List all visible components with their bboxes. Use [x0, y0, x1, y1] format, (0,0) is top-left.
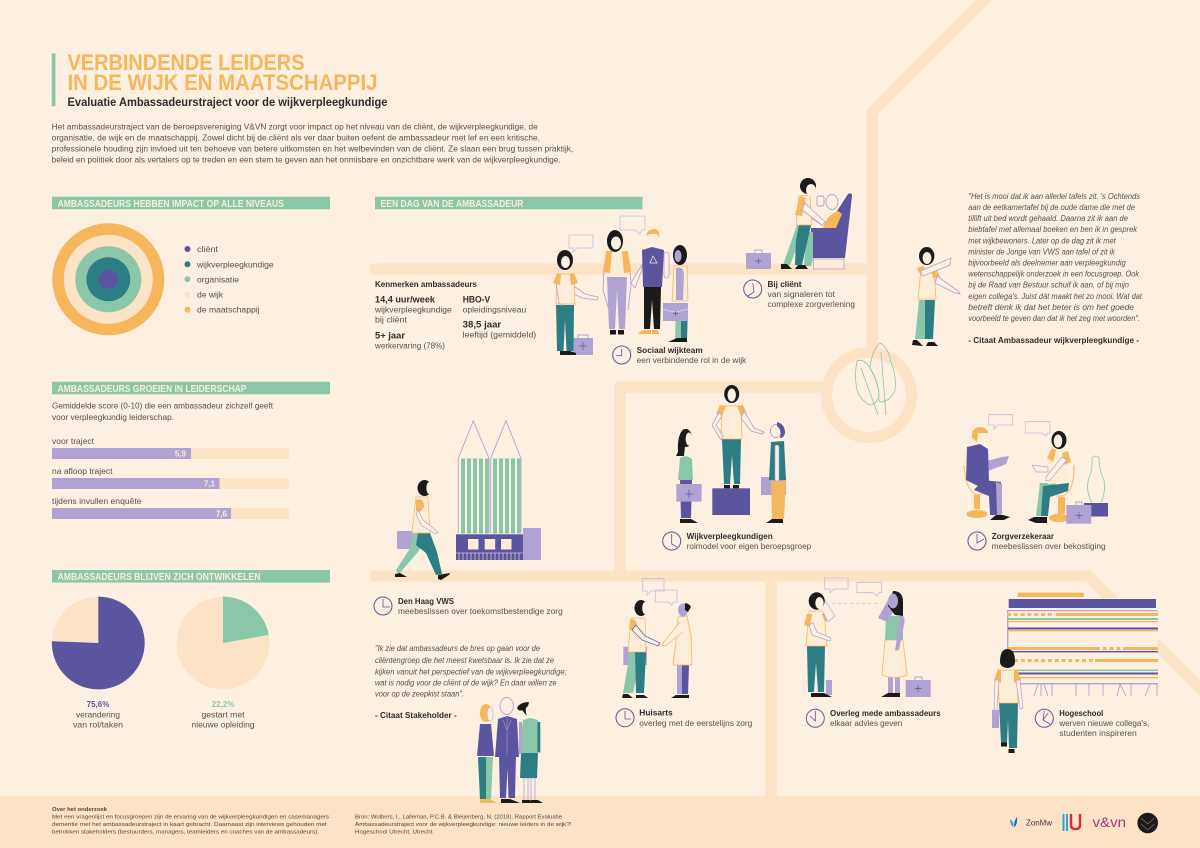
quote: stakeholder: "Ik zie dat ambassadeurs de bres op gaan voor de	[375, 644, 540, 653]
caption: huisarts	[616, 709, 752, 728]
bar chart: 5,9	[175, 450, 187, 459]
about the research: betrokken stakeholders (bestuurders, managers, teamleiders en coaches van de ambassadeurs).	[52, 829, 319, 835]
source: Ambassadeurstraject voor de wijkverpleegkundige: nieuwe leiders in de wijk?!	[355, 822, 572, 828]
pie chart: verandering: verandering	[76, 710, 120, 719]
heading: leiderschap: AMBASSADEURS GROEIEN IN LEIDERSCHAP	[58, 384, 247, 395]
bubbles and dashed line	[824, 578, 882, 604]
quote: ambassadeur: biebtafel met allemaal boeken en ben ik in gesprek	[968, 225, 1138, 234]
title block: VERBINDENDE LEIDERS	[68, 50, 304, 75]
caption: wijkverpleegkundigen	[663, 532, 812, 551]
heading: impact: AMBASSADEURS HEBBEN IMPACT OP ALLE NIVEAUS	[58, 199, 284, 210]
briefcase	[746, 250, 771, 269]
illustration: huisarts	[622, 579, 692, 698]
quote: ambassadeur: bijvoorbeeld als deelnemer aan verpleegkundig	[968, 258, 1126, 268]
heading: een dag van de ambassadeur	[375, 197, 642, 210]
person: colleague on phone	[878, 591, 907, 697]
quote: stakeholder: kijken vanuit het perspectief van de wijkverpleegkundige;	[375, 667, 567, 676]
footer text and logos	[52, 807, 1158, 835]
caption: sociaal wijkteam: een verbindende rol in de wijk	[637, 356, 747, 365]
quote: ambassadeur: minister de Jonge van VWS aan tafel of zit ik	[968, 247, 1116, 256]
illustration: zorgverzekeraar	[964, 415, 1108, 524]
caption: huisarts: overleg met de eerstelijns zorg	[639, 719, 752, 728]
about the research: Over het onderzoek	[52, 807, 107, 813]
briefcase	[1066, 502, 1091, 524]
concentric circles chart	[52, 223, 164, 335]
caption: den haag vws: Den Haag VWS	[398, 597, 455, 606]
pie chart: nieuwe opleiding	[177, 597, 269, 730]
illustration: sociaal wijkteam	[553, 216, 688, 355]
kenmerken ambassadeurs: 38,5 jaar	[463, 320, 501, 330]
pie chart: nieuwe opleiding: nieuwe opleiding	[192, 721, 254, 730]
logo: v&vn: v&vn	[1092, 814, 1126, 830]
person: student from behind	[992, 649, 1023, 753]
legend	[184, 245, 274, 315]
legend: cliënt	[197, 245, 219, 254]
pie chart: verandering	[52, 597, 145, 730]
kenmerken ambassadeurs	[374, 280, 537, 350]
speech bubbles	[569, 216, 645, 252]
title block	[52, 50, 387, 109]
building	[1006, 593, 1158, 698]
pie chart: nieuwe opleiding: gestart met	[202, 710, 245, 719]
caption: sociaal wijkteam	[613, 346, 747, 365]
quote: ambassadeur: tillift uit bed wordt gehaald. Daarna zit ik aan de	[968, 214, 1129, 223]
caption: huisarts: Huisarts	[639, 709, 673, 718]
quote: ambassadeur: wetenschappelijk onderzoek in een focusgroep. Ook	[968, 270, 1140, 279]
bar chart: voor traject	[52, 437, 95, 446]
caption: den haag vws	[374, 597, 563, 616]
bar chart: 7,6	[216, 510, 228, 519]
kenmerken ambassadeurs: 14,4 uur/week	[375, 294, 436, 306]
caption: overleg mede ambassadeurs: elkaar advies geven	[830, 719, 902, 728]
kenmerken ambassadeurs: werkervaring (78%)	[374, 342, 445, 350]
source: Bron: Wolbers, I., Lalleman, P.C.B. & Bleijenberg, N. (2018). Rapport Evaluatie	[355, 815, 562, 821]
kenmerken ambassadeurs: opleidingsniveau	[463, 306, 526, 314]
person: woman green jacket	[517, 702, 543, 803]
person: team member with purple trousers	[603, 230, 631, 334]
person: ambassadeur on phone	[804, 592, 835, 697]
caption: wijkverpleegkundigen: rolmodel voor eigen beroepsgroep	[687, 542, 812, 551]
caption: zorgverzekeraar: meebeslissen over bekostiging	[992, 542, 1106, 551]
person: right looking up	[761, 422, 786, 523]
chart description: voor verpleegkundig leiderschap.	[52, 413, 174, 422]
quote: stakeholder	[375, 644, 567, 720]
person: team member left	[553, 250, 598, 355]
kenmerken ambassadeurs: 5+ jaar	[375, 330, 405, 342]
person: huisarts in white coat	[662, 603, 692, 698]
intro paragraph: beleid en politiek door als vertalers op te treden en een stem te geven aan het onmisbare en onzichtbare werk van de wijkverpleegkundige.	[52, 156, 561, 165]
legend: de maatschappij	[197, 306, 260, 315]
person: man seated	[964, 427, 1010, 520]
caption: bij cliënt: complexe zorgverlening	[768, 300, 855, 309]
caption: bij cliënt: Bij cliënt	[768, 280, 802, 289]
caption: den haag vws: meebeslissen over toekomstbestendige zorg	[398, 607, 563, 616]
illustration: hogeschool	[992, 593, 1158, 753]
quote: stakeholder: cliëntengroep die het meest kwetsbaar is. Ik zie dat ze	[375, 656, 555, 665]
caption: hogeschool	[1035, 709, 1149, 738]
chart description: Gemiddelde score (0-10) die een ambassadeur zichzelf geeft	[52, 402, 274, 410]
person: woman orange hair	[477, 704, 497, 803]
quote: stakeholder: voor op de zeepkist staan".	[375, 690, 464, 698]
plant in pot	[1084, 456, 1108, 516]
footer band	[0, 796, 1200, 848]
person: standing on box	[712, 385, 764, 488]
caption: overleg mede ambassadeurs: Overleg mede ambassadeurs	[830, 709, 941, 718]
caption: bij cliënt	[744, 280, 855, 309]
road network	[375, 0, 1200, 800]
person: left with briefcase	[676, 429, 702, 523]
legend: organisatie	[197, 275, 240, 284]
bar chart: tijdens invullen enquête	[52, 497, 142, 506]
illustration: wijkverpleegkundigen	[676, 385, 786, 523]
logo: ZonMw: ZonMw	[1026, 818, 1052, 828]
caption: zorgverzekeraar: Zorgverzekeraar	[992, 532, 1054, 541]
illustration: den haag building	[395, 421, 541, 580]
panel: groeien in leiderschap	[52, 382, 330, 519]
chair	[811, 193, 852, 269]
person: walking	[395, 480, 450, 580]
kenmerken ambassadeurs: wijkverpleegkundige	[374, 306, 452, 314]
caption: zorgverzekeraar	[968, 532, 1106, 551]
source: Hogeschool Utrecht, Utrecht.	[355, 829, 434, 835]
intro paragraph	[52, 123, 573, 165]
quote: ambassadeur: aan de eetkamertafel bij de oude dame die met de	[968, 203, 1136, 212]
bar chart: 7,1	[204, 480, 216, 489]
quote: ambassadeur: betreft denk ik dat het beter is om het goede	[968, 303, 1135, 312]
quote: ambassadeur: bij de Raad van Bestuur schuif ik aan, of bij mijn	[968, 281, 1130, 290]
logo: HU	[1062, 814, 1080, 831]
icon: plant in circle	[856, 343, 896, 415]
quote: ambassadeur: voorbeeld te geven dan dat ik het zeg met woorden".	[968, 314, 1140, 323]
bar chart	[52, 437, 289, 519]
panel: blijven zich ontwikkelen	[52, 570, 330, 730]
carer	[781, 178, 825, 269]
caption: wijkverpleegkundigen: Wijkverpleegkundigen	[687, 532, 773, 541]
towers	[458, 421, 521, 534]
source	[355, 815, 572, 835]
kenmerken ambassadeurs: leeftijd (gemiddeld)	[463, 330, 537, 340]
intro paragraph: Het ambassadeurstraject van de beroepsvereniging V&VN zorgt voor impact op het niveau van de cliënt, de wijkverpleegkundige, de	[52, 123, 538, 132]
intro paragraph: professionele houding zijn invloed uit ten behoeve van betere uitkomsten en het welbevinden van de cliënt. Ze slaan een brug tussen praktijk,	[52, 145, 573, 154]
about the research: Met een vragenlijst en focusgroepen zijn de ervaring van de wijkverpleegkundigen en casemanagers	[52, 815, 329, 821]
kenmerken ambassadeurs: HBO-V	[463, 294, 491, 306]
kenmerken ambassadeurs: bij cliënt	[375, 316, 408, 324]
caption: bij cliënt: van signaleren tot	[768, 290, 836, 299]
client in chair	[804, 194, 842, 266]
about the research	[52, 807, 329, 835]
quote: ambassadeur	[968, 192, 1143, 345]
quote: stakeholder: wat is nodig voor de cliënt of de wijk? En daar willen ze	[375, 678, 557, 688]
quote: stakeholder: - Citaat Stakeholder -	[375, 711, 457, 720]
person: ambassadeur shaking hands	[622, 600, 660, 698]
heading: een dag van de ambassadeur: EEN DAG VAN DE AMBASSADEUR	[380, 199, 524, 210]
intro paragraph: organisatie, de wijk en de maatschappij. Zowel dicht bij de cliënt als ver daar buiten oefent de ambassadeur met lef en een kritische,	[52, 134, 540, 143]
person: woman seated	[1028, 431, 1074, 523]
quote: ambassadeur: - Citaat Ambassadeur wijkverpleegkundige -	[968, 336, 1139, 345]
logo: black circle	[1137, 813, 1158, 833]
person: team member with blue shirt	[631, 229, 669, 334]
quote: ambassadeur: met wijkbewoners. Later op de dag zit ik met	[968, 236, 1116, 245]
person: team member with briefcase	[663, 245, 688, 342]
logo: ZonMw	[1010, 817, 1052, 828]
pie chart: verandering: 75,6%	[87, 700, 109, 709]
quote: ambassadeur: "Het is mooi dat ik aan allerlei tafels zit. 's Ochtends	[968, 192, 1140, 201]
bubbles	[643, 579, 677, 605]
bar chart: na afloop traject	[52, 467, 113, 476]
illustration: overleg mede ambassadeurs	[804, 578, 931, 697]
base	[456, 528, 541, 560]
caption: hogeschool: Hogeschool	[1059, 709, 1103, 718]
illustration: stakeholders	[477, 698, 543, 803]
pie chart: verandering: van rol/taken	[73, 721, 123, 730]
legend: wijkverpleegkundige	[196, 260, 274, 269]
heading: leiderschap	[52, 382, 330, 395]
caption: hogeschool: werven nieuwe collega's,	[1058, 719, 1149, 728]
about the research: dementie met het ambassadeurstraject in kaart gebracht. Daarnaast zijn interviews gehouden met	[52, 822, 327, 828]
briefcase	[906, 677, 931, 697]
heading: ontwikkelen: AMBASSADEURS BLIJVEN ZICH ONTWIKKELEN	[58, 572, 260, 583]
panel: impact op alle niveaus	[52, 197, 330, 335]
title block: Evaluatie Ambassadeurstraject voor de wijkverpleegkundige	[68, 97, 388, 109]
illustration: bij cliënt	[746, 178, 852, 269]
box	[712, 488, 750, 515]
chart description	[52, 402, 274, 422]
kenmerken ambassadeurs: Kenmerken ambassadeurs	[375, 280, 478, 289]
person: man in suit	[495, 698, 520, 803]
legend: de wijk	[197, 291, 224, 300]
title block: IN DE WIJK EN MAATSCHAPPIJ	[68, 70, 378, 95]
caption: overleg mede ambassadeurs	[806, 709, 941, 728]
bubbles	[989, 415, 1050, 436]
illustration: person pointing	[912, 247, 960, 346]
caption: hogeschool: studenten inspireren	[1059, 729, 1137, 738]
quote: ambassadeur: eigen collega's. Juist dát maakt het zo mooi. Wat dat	[968, 292, 1143, 301]
caption: sociaal wijkteam: Sociaal wijkteam	[637, 346, 703, 355]
pie chart: nieuwe opleiding: 22,2%	[212, 700, 234, 709]
